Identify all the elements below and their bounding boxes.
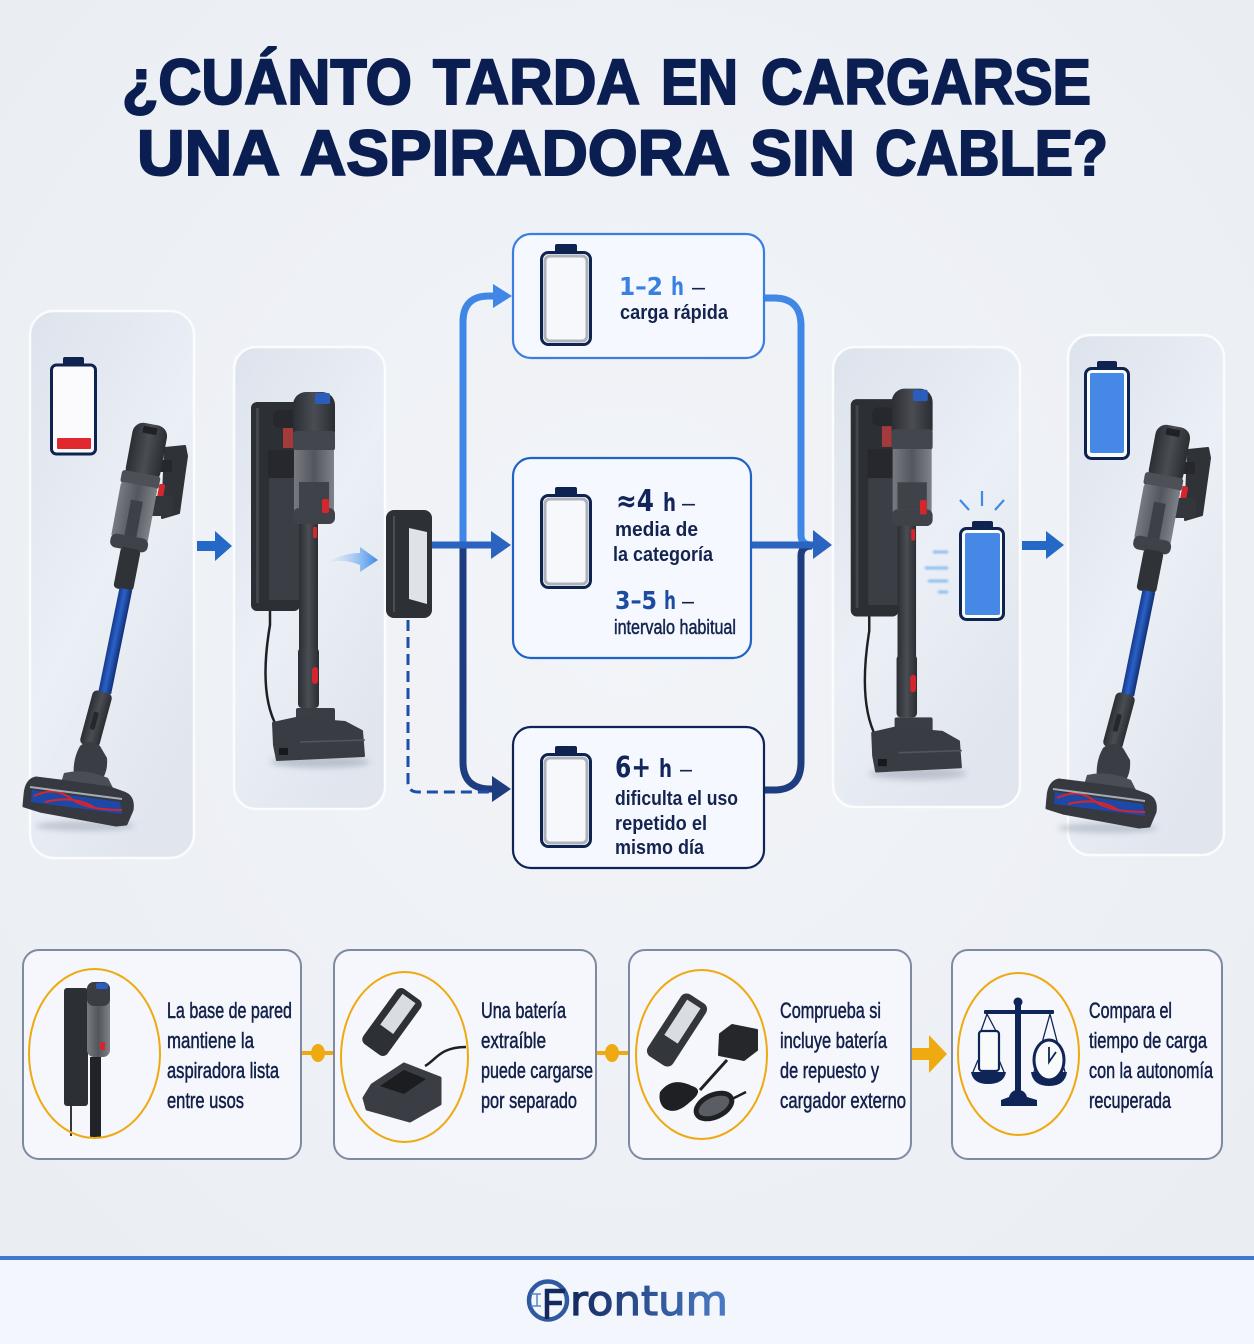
icon: low battery: [52, 357, 96, 454]
text: tip 1: La base de pared: [167, 998, 292, 1023]
text: tip 4: [1089, 998, 1214, 1113]
connector: dot 1: [302, 1044, 333, 1062]
ellipse: photo ring: [341, 972, 468, 1142]
text: tip 4: tiempo de carga: [1089, 1028, 1208, 1053]
text: media de la categoría: [613, 519, 714, 566]
icon: battery: [542, 244, 590, 344]
title: ¿CUÁNTO: [122, 46, 412, 118]
title: SIN: [750, 117, 855, 189]
text: tip 3: de repuesto y: [780, 1058, 879, 1083]
text: 1-2 h: –: [692, 274, 706, 301]
logo: Frontum: rontum: [570, 1277, 728, 1325]
title: ASPIRADORA: [300, 117, 730, 189]
text: 6+ h: –: [680, 756, 693, 783]
text: tip 3: cargador externo: [780, 1088, 906, 1113]
icon: battery: [542, 746, 590, 846]
icon: wall mini vacuum: [64, 982, 110, 1137]
title: EN: [661, 46, 738, 118]
text: about 4 h: –: [682, 490, 696, 517]
text: dificulta el uso repetido: repetido el: [615, 813, 707, 835]
icon: removable battery: [386, 510, 432, 618]
icon: full battery: [1086, 361, 1128, 458]
text: 3-5 h: h: [664, 586, 676, 615]
card: slow charge: [513, 727, 764, 868]
text: tip 3: Comprueba si: [780, 998, 881, 1023]
panel: charging vacuum: [833, 347, 1020, 807]
vacuum: wall mounted charging: [851, 389, 967, 780]
connector: dot 2: [597, 1044, 628, 1062]
text: about 4 h: [616, 484, 696, 519]
text: carga rápida: carga rápida: [620, 302, 729, 324]
title: UNA: [137, 117, 280, 189]
card: removable battery tip: [334, 950, 596, 1159]
footer band: [0, 1256, 1254, 1344]
panel: wall dock vacuum: [234, 347, 385, 809]
text: 6+ h: h: [659, 754, 672, 783]
text: tip 1: aspiradora lista: [167, 1058, 280, 1083]
card: spare battery tip: [629, 950, 911, 1159]
title: TARDA: [433, 46, 640, 118]
vacuum: wall mounted: [251, 392, 370, 768]
text: tip 2: puede cargarse: [481, 1058, 593, 1083]
icon: battery: [542, 487, 590, 588]
text: tip 1: [167, 998, 292, 1113]
arrow: to full vacuum: [1022, 531, 1064, 559]
text: tip 3: [780, 998, 906, 1113]
vacuum: tilted standing: [24, 420, 187, 831]
text: 3-5 h: [615, 586, 695, 615]
text: 1-2 h: h: [671, 272, 684, 301]
text: tip 1: mantiene la: [167, 1028, 255, 1053]
text: media de la categoría: media de: [615, 519, 698, 541]
text: tip 3: incluye batería: [780, 1028, 888, 1053]
arrow: yellow to compare: [912, 1035, 947, 1073]
card: category average: [513, 458, 751, 658]
flow lines: branches and merges: [408, 284, 832, 802]
text: intervalo habitual: intervalo habitual: [614, 617, 736, 639]
text: tip 4: con la autonomía: [1089, 1058, 1214, 1083]
title: CABLE?: [875, 117, 1108, 189]
icon: scales with battery and clock: [971, 998, 1067, 1106]
text: 6+ h: [615, 750, 693, 784]
text: dificulta el uso repetido: mismo día: [615, 837, 705, 859]
arrow: to wall dock: [197, 531, 232, 561]
title: CARGARSE: [761, 46, 1091, 118]
icon: battery, adapter, cable: [644, 991, 757, 1124]
ellipse: photo ring: [29, 969, 160, 1138]
ellipse: photo ring: [636, 970, 767, 1139]
text: dificulta el uso repetido: [615, 788, 738, 859]
arrow: curved to battery: [327, 547, 378, 572]
text: tip 2: por separado: [481, 1088, 577, 1113]
text: tip 2: [481, 998, 593, 1113]
text: 1-2 h: 1–2: [619, 272, 663, 301]
text: 1-2 h: [619, 272, 706, 301]
card: wall base tip: [23, 950, 301, 1159]
icon: charging battery: [960, 491, 1004, 620]
text: dificulta el uso repetido: dificulta el uso: [615, 788, 738, 810]
text: 3-5 h: –: [682, 588, 695, 615]
icon: battery and dock: [360, 986, 466, 1121]
vacuum: tilted standing full: [1047, 422, 1210, 833]
card: fast charge: [513, 234, 764, 358]
ellipse: icon ring: [958, 973, 1079, 1135]
text: 3-5 h: 3–5: [615, 586, 657, 615]
text: 6+ h: 6+: [615, 750, 651, 784]
title: [122, 46, 1108, 189]
panel: full battery vacuum: [1047, 335, 1224, 855]
text: about 4 h: ≈4: [616, 484, 654, 519]
text: tip 4: recuperada: [1089, 1088, 1172, 1113]
panel: empty battery vacuum: [24, 311, 194, 858]
text: tip 2: Una batería: [481, 998, 567, 1023]
text: tip 1: entre usos: [167, 1088, 244, 1113]
icon: charge motion lines: [925, 552, 948, 592]
text: media de la categoría: la categoría: [613, 544, 714, 566]
text: tip 4: Compara el: [1089, 998, 1172, 1023]
text: tip 2: extraíble: [481, 1028, 546, 1053]
text: about 4 h: h: [663, 488, 676, 517]
card: compare tip: [952, 950, 1222, 1159]
